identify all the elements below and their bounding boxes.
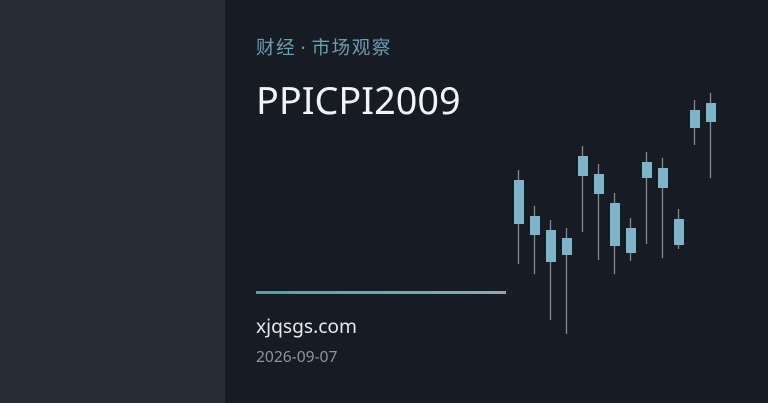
panel: left sidebar xyxy=(0,0,225,403)
category label: 财经 · 市场观察 xyxy=(256,35,392,60)
site name: xjqsgs.com xyxy=(256,312,357,339)
date: 2026-09-07 xyxy=(256,345,337,367)
accent rule xyxy=(256,291,506,294)
title: PPICPI2009 xyxy=(256,74,461,126)
